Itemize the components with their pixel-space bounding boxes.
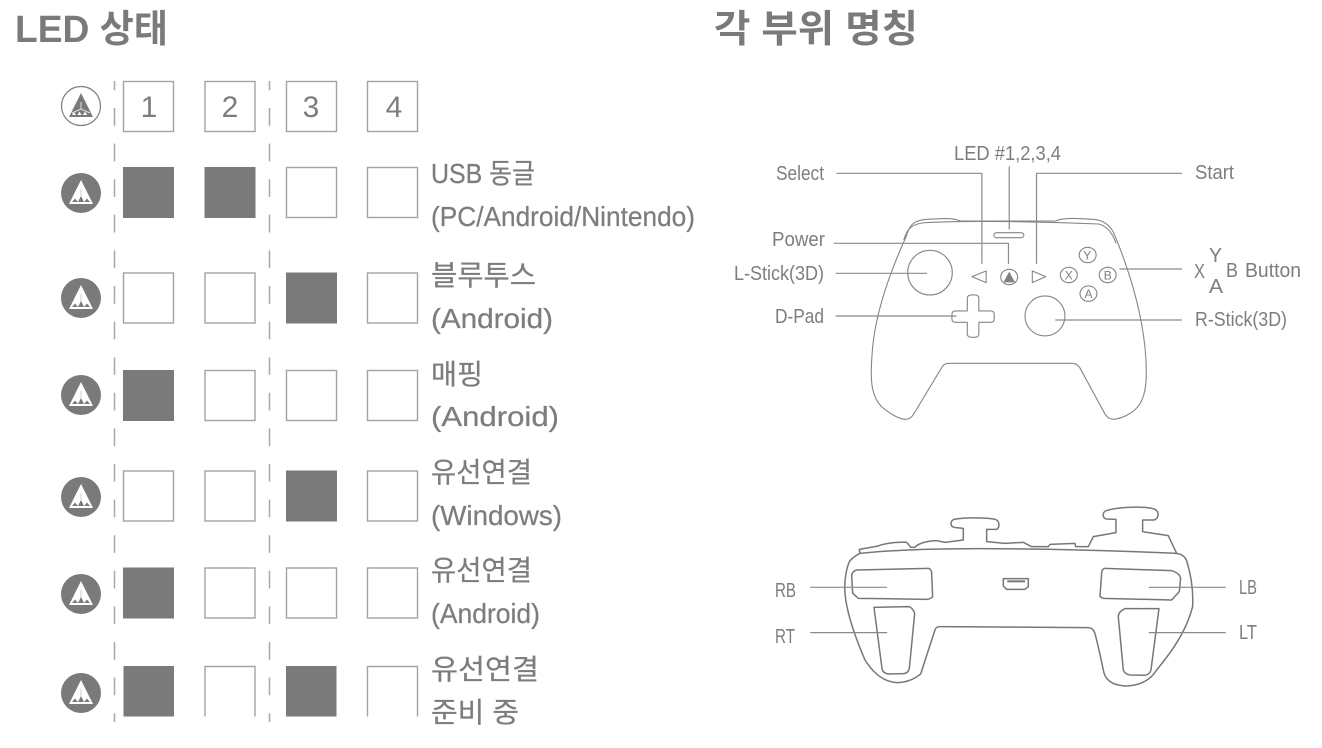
icon: outlined logo — [62, 86, 100, 126]
shoulder lines — [904, 221, 1116, 243]
label: Start: Start — [1195, 162, 1234, 184]
leader lines — [811, 587, 1225, 633]
dashed column divider right — [268, 81, 270, 722]
label: D-Pad: D-Pad — [775, 306, 824, 328]
heading: part names: 각 부위 명칭 — [714, 9, 918, 51]
heading: LED status: LED 상태 — [15, 9, 168, 51]
button X — [1060, 267, 1077, 283]
dashed column divider left — [114, 81, 116, 722]
label: Android: (Android) — [431, 598, 540, 629]
LED box 3: 3 — [303, 91, 319, 124]
label: wired connection: 유선연결 — [431, 555, 532, 586]
label: XYAB Button: A — [1209, 276, 1224, 298]
label: RB: RB — [775, 580, 796, 602]
USB port — [1003, 579, 1028, 589]
label: LB: LB — [1239, 577, 1257, 599]
label: XYAB Button: Button — [1245, 260, 1301, 282]
LED box 3 — [286, 82, 336, 132]
label: RT: RT — [775, 626, 795, 648]
label: mapping: 매핑 — [431, 359, 483, 390]
label: XYAB Button: B — [1226, 260, 1238, 282]
body outline — [871, 234, 1146, 419]
face button letter Y: Y — [1083, 248, 1091, 262]
LED box 2 — [205, 82, 255, 132]
row: Bluetooth — [61, 260, 553, 334]
row: wired Windows — [61, 457, 562, 531]
top bumps and stick profiles — [859, 507, 1177, 553]
icon: filled logo — [61, 375, 101, 415]
LED box 2: 2 — [222, 91, 238, 124]
label: Power: Power — [772, 229, 825, 251]
LB bumper — [1100, 568, 1181, 600]
icon: filled logo — [61, 574, 101, 614]
face button letter A: A — [1084, 287, 1093, 301]
leader lines — [834, 167, 1182, 320]
label: wired connection: 유선연결 — [431, 654, 539, 685]
controller front outline — [834, 167, 1182, 419]
select triangle — [972, 271, 986, 283]
label: PC/Android/Nintendo: (PC/Android/Nintendo) — [431, 201, 695, 232]
controller back outline — [811, 507, 1225, 686]
label: wired connection: 유선연결 — [431, 457, 532, 488]
button Y — [1079, 247, 1096, 263]
header row: LED numbers — [62, 82, 418, 132]
LED bar — [994, 233, 1024, 238]
RB bumper — [852, 568, 933, 599]
button A — [1080, 286, 1097, 301]
icon: filled logo — [61, 673, 101, 713]
right stick — [1025, 296, 1065, 336]
LED box 4: 4 — [386, 91, 402, 124]
LT trigger — [1118, 609, 1159, 675]
row: USB dongle — [61, 158, 695, 232]
label: preparing: 준비 중 — [431, 697, 519, 728]
label: L-Stick: L-Stick(3D) — [734, 263, 824, 285]
RT trigger — [874, 607, 915, 674]
label: Windows: (Windows) — [431, 500, 562, 531]
face button letter X: X — [1065, 268, 1073, 282]
row: wired connection preparing — [61, 654, 539, 728]
label: LT: LT — [1239, 622, 1257, 644]
label: XYAB Button: X — [1194, 261, 1205, 283]
button B — [1099, 267, 1116, 283]
face button letter B: B — [1104, 268, 1112, 282]
power button — [1001, 269, 1018, 285]
D-pad — [952, 295, 994, 337]
row: mapping — [61, 359, 559, 432]
LED box 1: 1 — [141, 91, 157, 124]
body outline — [845, 549, 1193, 686]
icon: filled logo — [61, 278, 101, 318]
diagram: controller back view — [775, 507, 1257, 686]
label: Android: (Android) — [431, 303, 553, 334]
row: wired Android — [61, 555, 540, 629]
start triangle — [1032, 271, 1046, 283]
label: Select: Select — [776, 163, 824, 185]
left stick — [908, 250, 952, 295]
label: XYAB Button: Y — [1209, 245, 1222, 267]
icon: filled logo — [61, 173, 101, 213]
label: Bluetooth: 블루투스 — [431, 260, 536, 291]
label: LED numbers: LED #1,2,3,4 — [954, 143, 1061, 165]
label: R-Stick: R-Stick(3D) — [1195, 309, 1287, 331]
diagram: controller front view — [734, 143, 1301, 419]
LED box 4 — [368, 82, 418, 132]
label: XYAB Button — [1194, 245, 1301, 298]
icon: filled logo — [61, 477, 101, 517]
label: Android: (Android) — [431, 401, 559, 432]
LED box 1 — [124, 82, 174, 132]
label: USB dongle: USB 동글 — [431, 158, 535, 189]
